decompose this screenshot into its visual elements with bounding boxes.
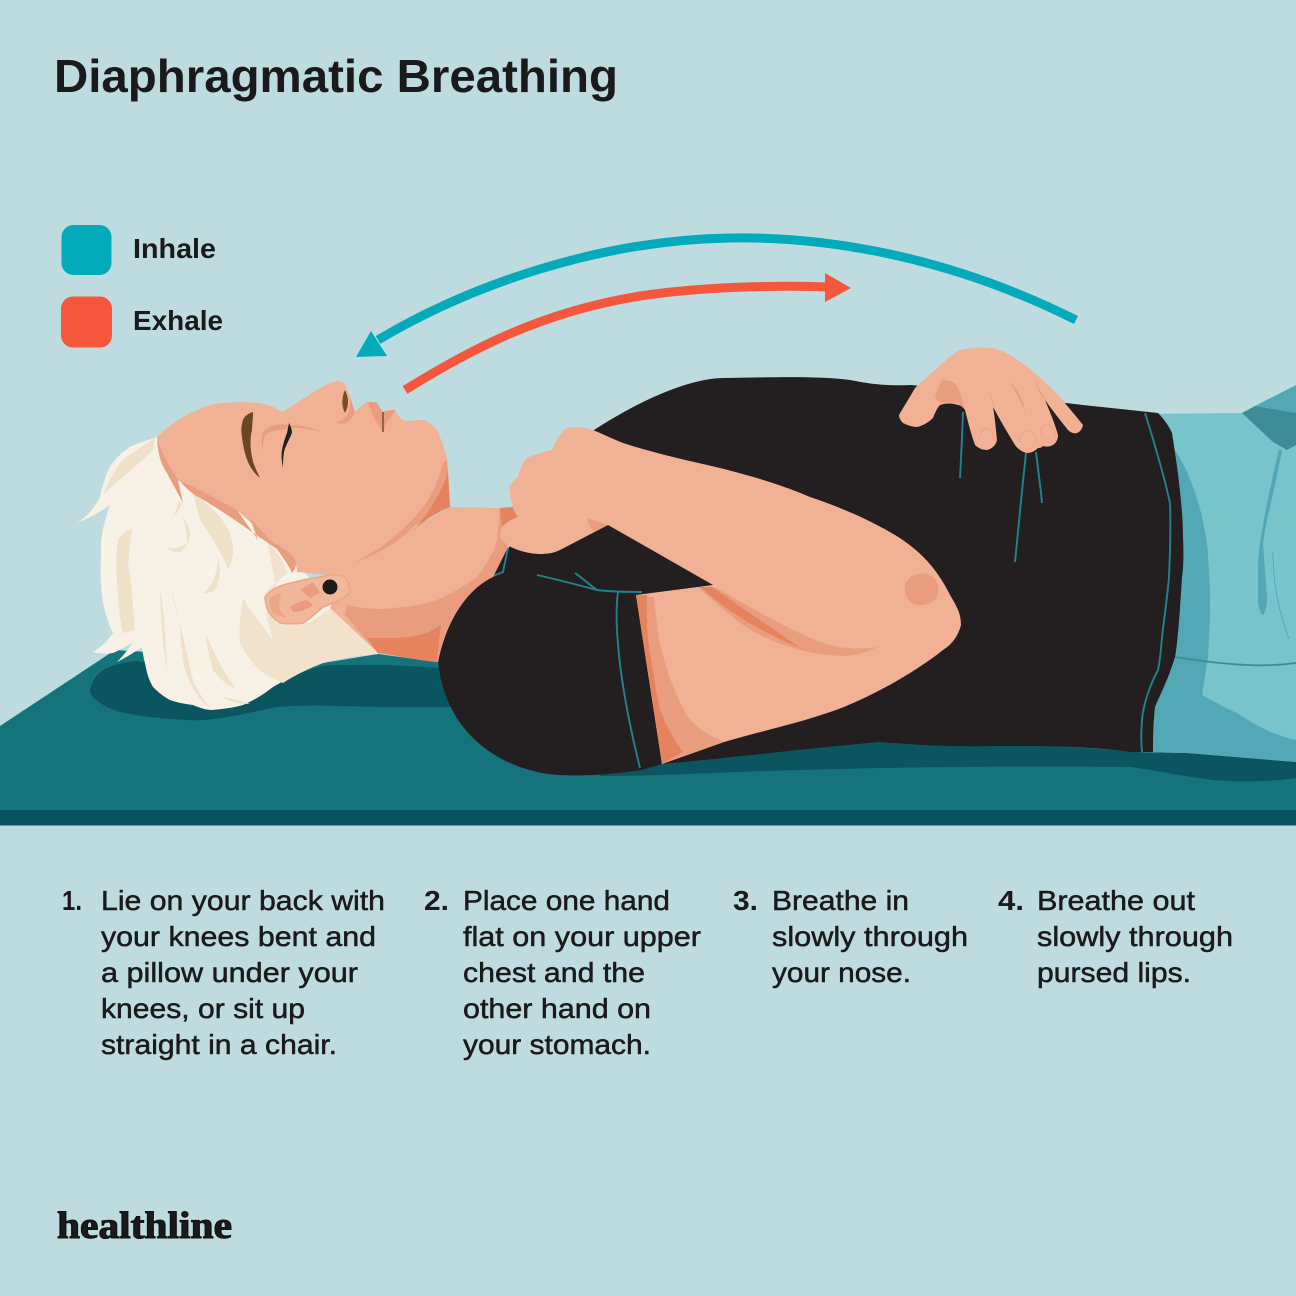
face bbox=[157, 381, 450, 577]
step 3 bbox=[733, 885, 968, 988]
step 4: pursed lips. bbox=[1037, 957, 1191, 988]
hair: shaded under-layer bbox=[240, 540, 378, 683]
neck bbox=[330, 507, 508, 662]
step 3: your nose. bbox=[772, 957, 911, 988]
step 2: flat on your upper bbox=[463, 921, 701, 952]
step 1: your knees bent and bbox=[101, 921, 376, 952]
step 1 bbox=[62, 885, 385, 1060]
arrow: exhale bbox=[405, 273, 851, 390]
arm: forearm and upper arm bbox=[560, 430, 961, 764]
step 3: Breathe in bbox=[772, 885, 909, 916]
legend: inhale label: Inhale bbox=[133, 233, 216, 264]
healthline logo: healthline bbox=[57, 1205, 232, 1247]
face: hairline shadow bbox=[157, 440, 296, 573]
step 1: knees, or sit up bbox=[101, 993, 305, 1024]
arm: deepest shadow bbox=[636, 595, 683, 764]
ear bbox=[265, 575, 350, 624]
step 3: slowly through bbox=[772, 921, 968, 952]
hand on chest: wrist shadow bbox=[587, 518, 608, 532]
pants: shaded side bbox=[1140, 447, 1296, 762]
hand on stomach: finger creases bbox=[988, 380, 1047, 412]
face: nose shadow bbox=[335, 398, 355, 424]
step 4: slowly through bbox=[1037, 921, 1233, 952]
pants bbox=[1140, 385, 1296, 762]
legend bbox=[61, 225, 223, 348]
arm bbox=[560, 430, 961, 764]
title: Diaphragmatic Breathing bbox=[54, 50, 618, 102]
pants: crease bbox=[1258, 449, 1282, 615]
face: mouth line bbox=[382, 412, 384, 432]
face: eyebrow bbox=[241, 412, 260, 478]
legend: exhale label: Exhale bbox=[133, 305, 223, 336]
mat bbox=[0, 650, 1296, 826]
pants: thin crease bbox=[1273, 552, 1289, 639]
hand on chest: neck wedge bbox=[500, 507, 518, 527]
step 2: other hand on bbox=[463, 993, 651, 1024]
pants: dark fold bbox=[1242, 406, 1296, 450]
face: lips bbox=[368, 402, 395, 432]
step 1: 1. bbox=[62, 885, 82, 916]
step 4 bbox=[998, 885, 1233, 988]
arm: elbow crease core bbox=[700, 587, 800, 648]
arm: elbow crease bbox=[698, 587, 877, 656]
ear: rim shading bbox=[270, 593, 287, 618]
hand on stomach: nails bbox=[979, 417, 1080, 444]
neck: deep shadow bbox=[367, 625, 441, 662]
legend: exhale swatch bbox=[61, 296, 112, 348]
face: eyelid bbox=[262, 424, 323, 452]
hand on stomach: palm shadow bbox=[935, 380, 965, 410]
step 4: Breathe out bbox=[1037, 885, 1195, 916]
pants: waist line bbox=[1175, 657, 1296, 665]
head shadow on mat bbox=[90, 661, 452, 720]
step 2: 2. bbox=[424, 885, 449, 916]
hand on chest bbox=[500, 427, 640, 554]
arrow: inhale bbox=[356, 238, 1076, 357]
hand on stomach bbox=[899, 348, 1083, 453]
face: jaw shadow bbox=[353, 460, 450, 563]
face: nostril bbox=[342, 390, 348, 413]
step 2: your stomach. bbox=[463, 1029, 651, 1060]
step 3: 3. bbox=[733, 885, 758, 916]
step 4: 4. bbox=[998, 885, 1024, 916]
step 2: chest and the bbox=[463, 957, 645, 988]
shirt bbox=[438, 377, 1183, 775]
hair: strands bbox=[103, 438, 250, 708]
neck: shadow band bbox=[345, 508, 508, 662]
face: closed eye lashes bbox=[282, 423, 292, 468]
step 1: Lie on your back with bbox=[101, 885, 385, 916]
pants: upper fold bbox=[1255, 385, 1296, 413]
arm: inner arm shadow bbox=[636, 595, 724, 764]
hair bbox=[77, 437, 378, 710]
step 2 bbox=[424, 885, 701, 1060]
step 2: Place one hand bbox=[463, 885, 670, 916]
hair: main shape bbox=[77, 437, 378, 710]
ear: inner folds bbox=[290, 582, 320, 612]
arm: elbow patch bbox=[902, 571, 941, 608]
ear: gauge earring bbox=[322, 580, 338, 594]
legend: inhale swatch bbox=[62, 225, 112, 275]
step 1: a pillow under your bbox=[101, 957, 358, 988]
pants: light area bbox=[1140, 385, 1296, 762]
shirt: seams bbox=[493, 412, 1170, 768]
step 1: straight in a chair. bbox=[101, 1029, 337, 1060]
face: deep jaw shadow bbox=[413, 470, 450, 530]
body shadow on mat bbox=[600, 742, 1296, 781]
